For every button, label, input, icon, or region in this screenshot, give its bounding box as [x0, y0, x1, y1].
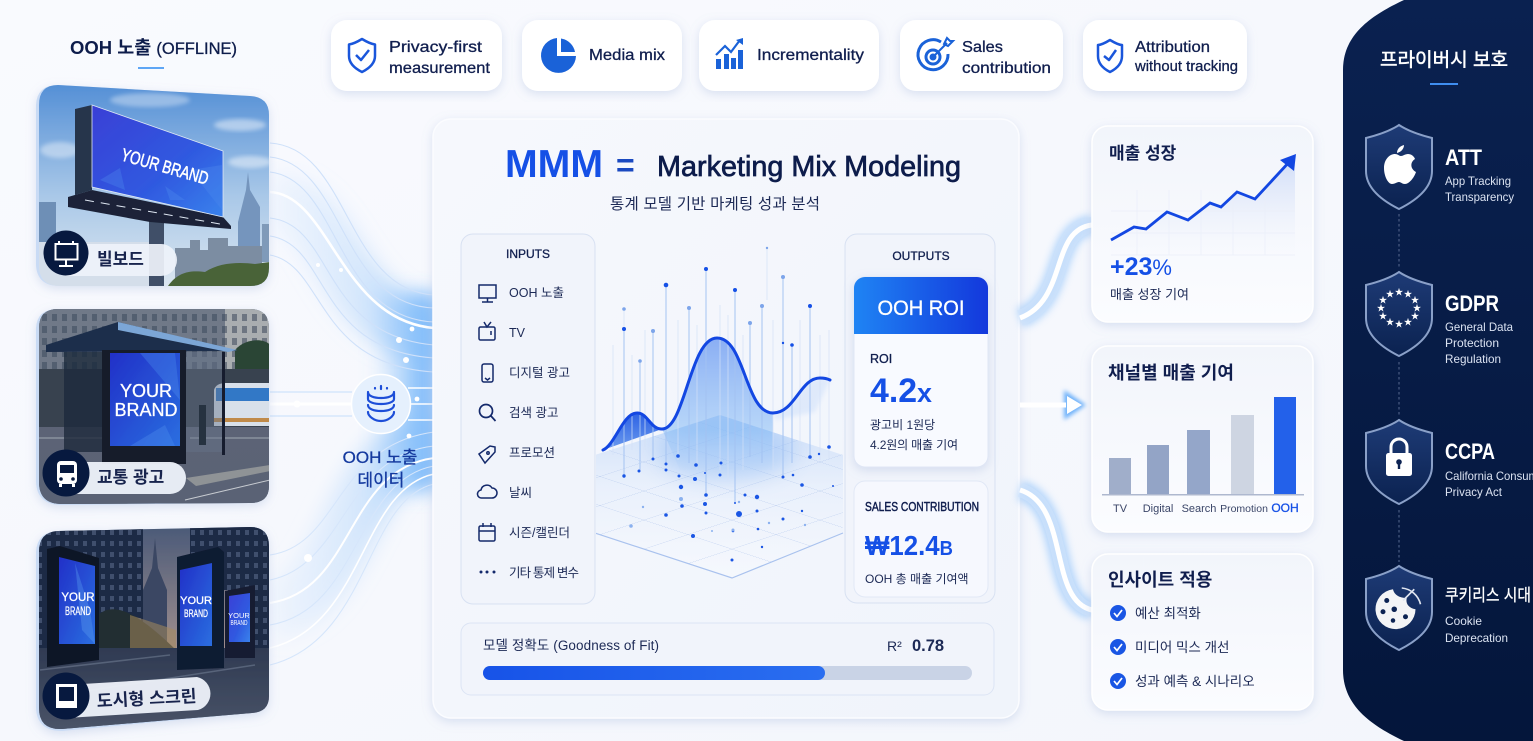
billboard face: [92, 105, 223, 217]
chip: sales contribution: contribution: [962, 60, 1051, 77]
heading: [1380, 49, 1508, 85]
data node: OOH exposure data: 데이터: [358, 471, 404, 490]
dots on stems: [622, 267, 812, 347]
icon: shield stars: [1366, 272, 1432, 356]
panel: revenue growth: 매출 성장 기여: [1110, 287, 1189, 302]
input: promotion: 프로모션: [509, 446, 555, 460]
label: billboard: [44, 230, 177, 276]
middle stream lines: [270, 388, 434, 420]
panel: outputs: [845, 234, 995, 603]
panel: goodness of fit: 모델 정확도 (Goodness of Fit): [483, 638, 659, 653]
card: OOH ROI: 4.2x: [870, 372, 932, 410]
chip: media mix: [522, 20, 682, 91]
input: OOH: [479, 285, 564, 302]
icon: billboard monitor: [56, 241, 78, 266]
bar chart: [1102, 397, 1304, 515]
billboard side: [75, 105, 92, 195]
panel: urban screens photo: YOUR: [61, 592, 95, 604]
card: OOH ROI: OOH ROI: [878, 296, 964, 320]
icon: shield check: [349, 39, 375, 72]
icon: pie chart: [541, 38, 576, 73]
arrow: to channel contribution: [1020, 390, 1086, 420]
input: OOH: OOH 노출: [509, 286, 564, 300]
panel: goodness of fit: R²: [887, 638, 902, 654]
card: sales contribution: OOH 총 매출 기여액: [865, 572, 969, 586]
bar chart: TV: [1113, 503, 1128, 515]
progress bar: [483, 666, 972, 680]
panel: contribution by channel: 채널별 매출 기여: [1108, 363, 1234, 383]
item: ATT: Transparency: [1445, 190, 1514, 204]
icon: shield stars: ★: [1411, 311, 1420, 321]
label: urban screen: [42, 672, 210, 720]
connector: to revenue growth: [1020, 225, 1092, 318]
panel: urban screens photo: YOUR: [180, 595, 212, 607]
data node: OOH exposure data: OOH 노출: [343, 448, 417, 467]
response curve: [603, 338, 830, 450]
input: TV: [479, 322, 526, 340]
glow behind data streams: [270, 200, 436, 610]
billboard platform: [68, 190, 231, 229]
bar chart: Digital: [1143, 503, 1173, 515]
icon: shield stars: ★: [1386, 317, 1395, 327]
icon: shield cookie: [1366, 566, 1432, 650]
chip: sales contribution: Sales: [962, 39, 1003, 56]
item: GDPR: [1366, 272, 1513, 366]
card: OOH ROI: 4.2원의 매출 기여: [870, 438, 958, 452]
panel: transit shelter photo: [36, 309, 270, 505]
icon: shield stars: ★: [1379, 311, 1388, 321]
icon: shield apple: [1366, 125, 1432, 209]
input: promotion: [479, 446, 555, 463]
chip: incrementality: Incrementality: [757, 47, 864, 64]
vertical lines: [624, 269, 810, 503]
flow streams: OOH data to model: [270, 143, 436, 665]
input: calendar: 시즌/캘린더: [509, 526, 570, 540]
label: urban screen: 도시형 스크린: [96, 687, 197, 711]
icon: shield stars: ★: [1404, 289, 1413, 299]
insight: media mix: 미디어 믹스 개선: [1135, 640, 1229, 655]
chip: privacy-first measurement: [331, 20, 502, 91]
chip: media mix: Media mix: [589, 47, 665, 64]
subtitle: 통계 모델 기반 마케팅 성과 분석: [610, 195, 820, 213]
card: OOH ROI: 광고비 1원당: [870, 418, 935, 432]
panel: revenue growth: 매출 성장: [1109, 144, 1177, 163]
city kiosk right: [225, 585, 255, 658]
item: ATT: App Tracking: [1445, 174, 1511, 188]
panel: goodness of fit: [461, 623, 994, 695]
input: search ads: [480, 404, 558, 421]
icon: shield stars: ★: [1413, 303, 1422, 313]
chip: attribution without tracking: [1083, 20, 1247, 91]
panel: transit shelter photo: BRAND: [114, 400, 178, 420]
item: cookieless era: [1366, 566, 1531, 650]
lower stream lines: [270, 432, 434, 665]
icon: shield lock: [1366, 420, 1432, 504]
panel: urban screens photo: BRAND: [184, 608, 208, 620]
panel: urban screens photo: [36, 527, 270, 731]
bus: [214, 383, 270, 426]
insight: forecast: 성과 예측 & 시나리오: [1135, 674, 1255, 689]
upper stream lines: [270, 143, 434, 372]
item: CCPA: Privacy Act: [1445, 485, 1503, 499]
city kiosk centre: [177, 547, 224, 670]
label: transit ad: 교통 광고: [97, 468, 164, 487]
icon: shield check: [1098, 40, 1122, 72]
title: =: [616, 147, 635, 183]
item: CCPA: [1366, 420, 1533, 504]
insight: budget optimization: [1110, 605, 1201, 621]
skyline: [39, 202, 56, 244]
dotted connectors: [1398, 214, 1400, 562]
item: GDPR: Protection: [1445, 336, 1499, 350]
card: sales contribution: [854, 481, 988, 597]
panel: privacy protection: [1343, 0, 1533, 741]
panel: MMM model: [433, 119, 1019, 718]
icon: database: [368, 386, 394, 421]
heading: 프라이버시 보호: [1380, 49, 1508, 71]
card: OOH ROI: [854, 277, 988, 467]
input: digital ads: 디지털 광고: [509, 366, 570, 380]
stream light nodes: [294, 263, 419, 562]
card: OOH ROI: ROI: [870, 352, 892, 366]
icon: rising bars: [716, 38, 743, 69]
chip: privacy-first measurement: measurement: [389, 60, 491, 77]
panel: urban screens photo: YOUR: [228, 611, 250, 620]
bar chart: OOH: [1271, 501, 1299, 515]
chip: incrementality: [699, 20, 879, 91]
panel: transit shelter photo: YOUR: [120, 381, 172, 401]
icon: shield stars: ★: [1386, 289, 1395, 299]
label: transit ad: [42, 450, 186, 496]
bar chart: Search: [1182, 503, 1216, 515]
icon: shield stars: ★: [1395, 287, 1404, 297]
label: billboard: 빌보드: [97, 250, 144, 269]
panel: billboard photo: [36, 85, 272, 287]
input: digital ads: [482, 364, 570, 382]
input: TV: TV: [509, 326, 526, 340]
city kiosk left: [47, 546, 99, 667]
data node: OOH exposure data: [343, 374, 417, 490]
chip: attribution without tracking: Attribution: [1135, 39, 1210, 56]
panel: insights applied: [1092, 554, 1313, 710]
chart: 3D response curve: [595, 247, 845, 580]
icon: shield stars: ★: [1411, 295, 1420, 305]
panel: goodness of fit: 0.78: [912, 637, 944, 655]
input: other: 기타 통제 변수: [509, 566, 579, 580]
item: GDPR: GDPR: [1445, 291, 1499, 316]
input: weather: [477, 485, 532, 500]
heading: OOH exposure (offline): OOH 노출 (OFFLINE): [70, 37, 237, 58]
icon: target: [918, 38, 953, 70]
floor grid: [596, 415, 843, 564]
card: sales contribution: ₩12.4B: [865, 530, 953, 561]
title: [505, 143, 961, 186]
card: sales contribution: SALES CONTRIBUTION: [865, 500, 979, 514]
panel: billboard photo: YOUR BRAND: [119, 145, 211, 189]
item: GDPR: General Data: [1445, 320, 1513, 334]
item: cookieless era: Cookie: [1445, 614, 1482, 628]
input: calendar: [479, 523, 570, 541]
line chart: [1111, 154, 1296, 255]
panel: inputs: INPUTS: [506, 247, 550, 261]
panel: urban screens photo: BRAND: [65, 606, 91, 618]
item: ATT: ATT: [1445, 145, 1482, 170]
item: GDPR: Regulation: [1445, 352, 1501, 366]
icon: shield stars: ★: [1379, 295, 1388, 305]
panel: outputs: OUTPUTS: [892, 249, 950, 263]
panel: urban screens photo: BRAND: [230, 618, 248, 627]
bar chart: Promotion: [1220, 503, 1268, 515]
panel: revenue growth: +23%: [1110, 253, 1172, 281]
connector: to insights: [1020, 490, 1092, 610]
icon: bus: [57, 461, 77, 487]
chip: privacy-first measurement: Privacy-first: [389, 39, 483, 56]
input: search ads: 검색 광고: [509, 406, 558, 420]
shelter frame: [64, 352, 104, 452]
shelter roof: [46, 322, 237, 352]
chip: attribution without tracking: without tracking: [1134, 59, 1238, 75]
scatter dots: [622, 445, 834, 562]
pole: [149, 220, 164, 287]
panel: contribution by channel: [1092, 346, 1313, 532]
panel: inputs: [461, 234, 595, 604]
item: cookieless era: Deprecation: [1445, 631, 1508, 645]
panel: revenue growth: [1092, 126, 1313, 322]
panel: insights applied: 인사이트 적용: [1108, 570, 1212, 590]
insight: budget optimization: 예산 최적화: [1135, 606, 1201, 621]
icon: screen: [56, 684, 77, 708]
item: CCPA: CCPA: [1445, 439, 1495, 464]
icon: shield stars: ★: [1404, 317, 1413, 327]
title: MMM: [505, 143, 603, 186]
chip: sales contribution: [900, 20, 1063, 91]
area under curve: [662, 340, 773, 456]
item: ATT: [1366, 125, 1514, 209]
icon: shield stars: ★: [1377, 303, 1386, 313]
icon: shield stars: ★: [1395, 319, 1404, 329]
title: Marketing Mix Modeling: [657, 151, 961, 183]
input: weather: 날씨: [509, 486, 532, 500]
